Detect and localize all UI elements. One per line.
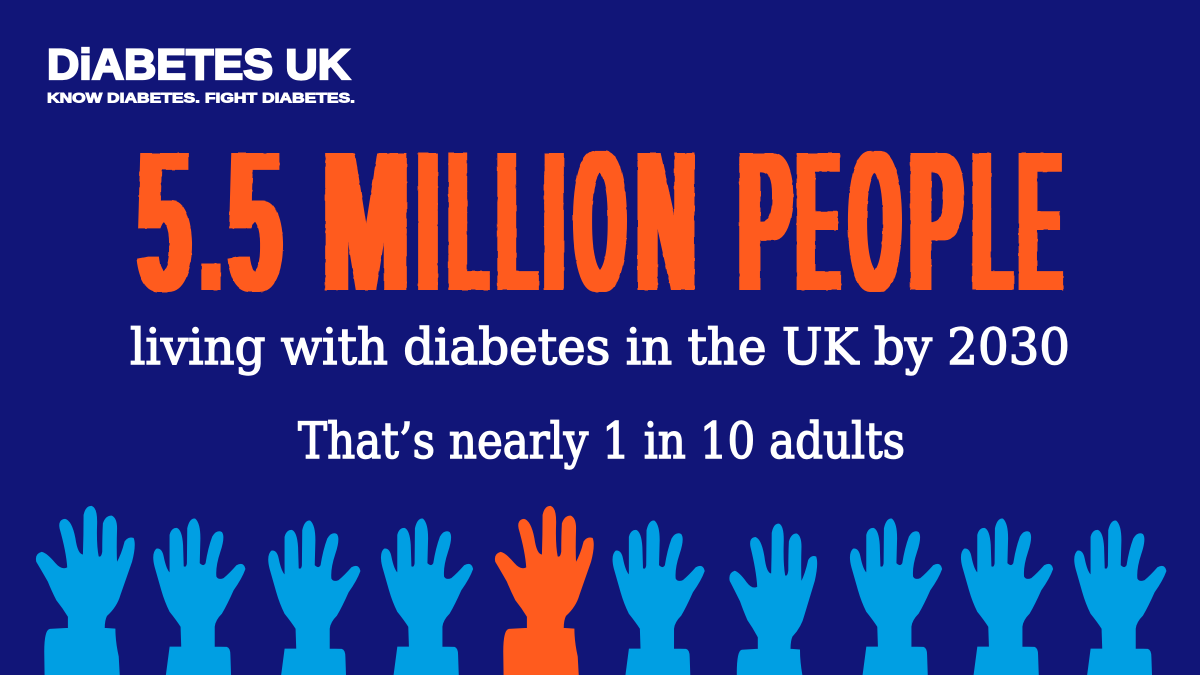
headline: 5.5 million people: N [637,107,694,336]
headline: 5.5 million people: 5 [138,107,190,336]
hand 1 [36,506,134,675]
headline: 5.5 million people: L [449,107,487,336]
hand 10 [1075,521,1166,675]
logo wordmark: DiABETES UK [47,41,350,89]
hand 3 [269,521,360,675]
headline: 5.5 million people: . [202,107,220,336]
headline: 5.5 million people: 5 [229,107,281,336]
hand 6 [613,521,704,675]
hand 5: highlighted orange [495,506,593,675]
headline: 5.5 million people: P [910,107,962,336]
row of ten raised hands [36,506,1166,675]
headline: 5.5 million people: P [739,107,790,336]
hand 7 [730,524,817,675]
headline: 5.5 million people: E [1019,107,1061,336]
hand 2 [154,519,245,675]
subheading: living with diabetes: living with diabetes in the UK by 2030 [130,318,1070,376]
headline: 5.5 million people: L [973,107,1011,336]
headline: 5.5 million people [136,107,1064,336]
headline: 5.5 million people: E [797,107,839,336]
hand 8 [850,519,942,675]
headline: 5.5 million people: L [498,107,535,336]
subheading: nearly 1 in 10 adults: That’s nearly 1 in 10 adults [298,412,905,470]
headline: 5.5 million people: I [545,107,563,336]
headline: 5.5 million people: M [323,107,409,336]
hand 9 [961,519,1053,675]
headline: 5.5 million people: O [850,107,900,336]
headline: 5.5 million people: I [419,107,437,336]
hand 4 [381,519,473,675]
logo tagline: KNOW DIABETES. FIGHT DIABETES. [47,90,355,106]
headline: 5.5 million people: O [575,107,625,336]
logo: Diabetes UK [47,41,355,106]
